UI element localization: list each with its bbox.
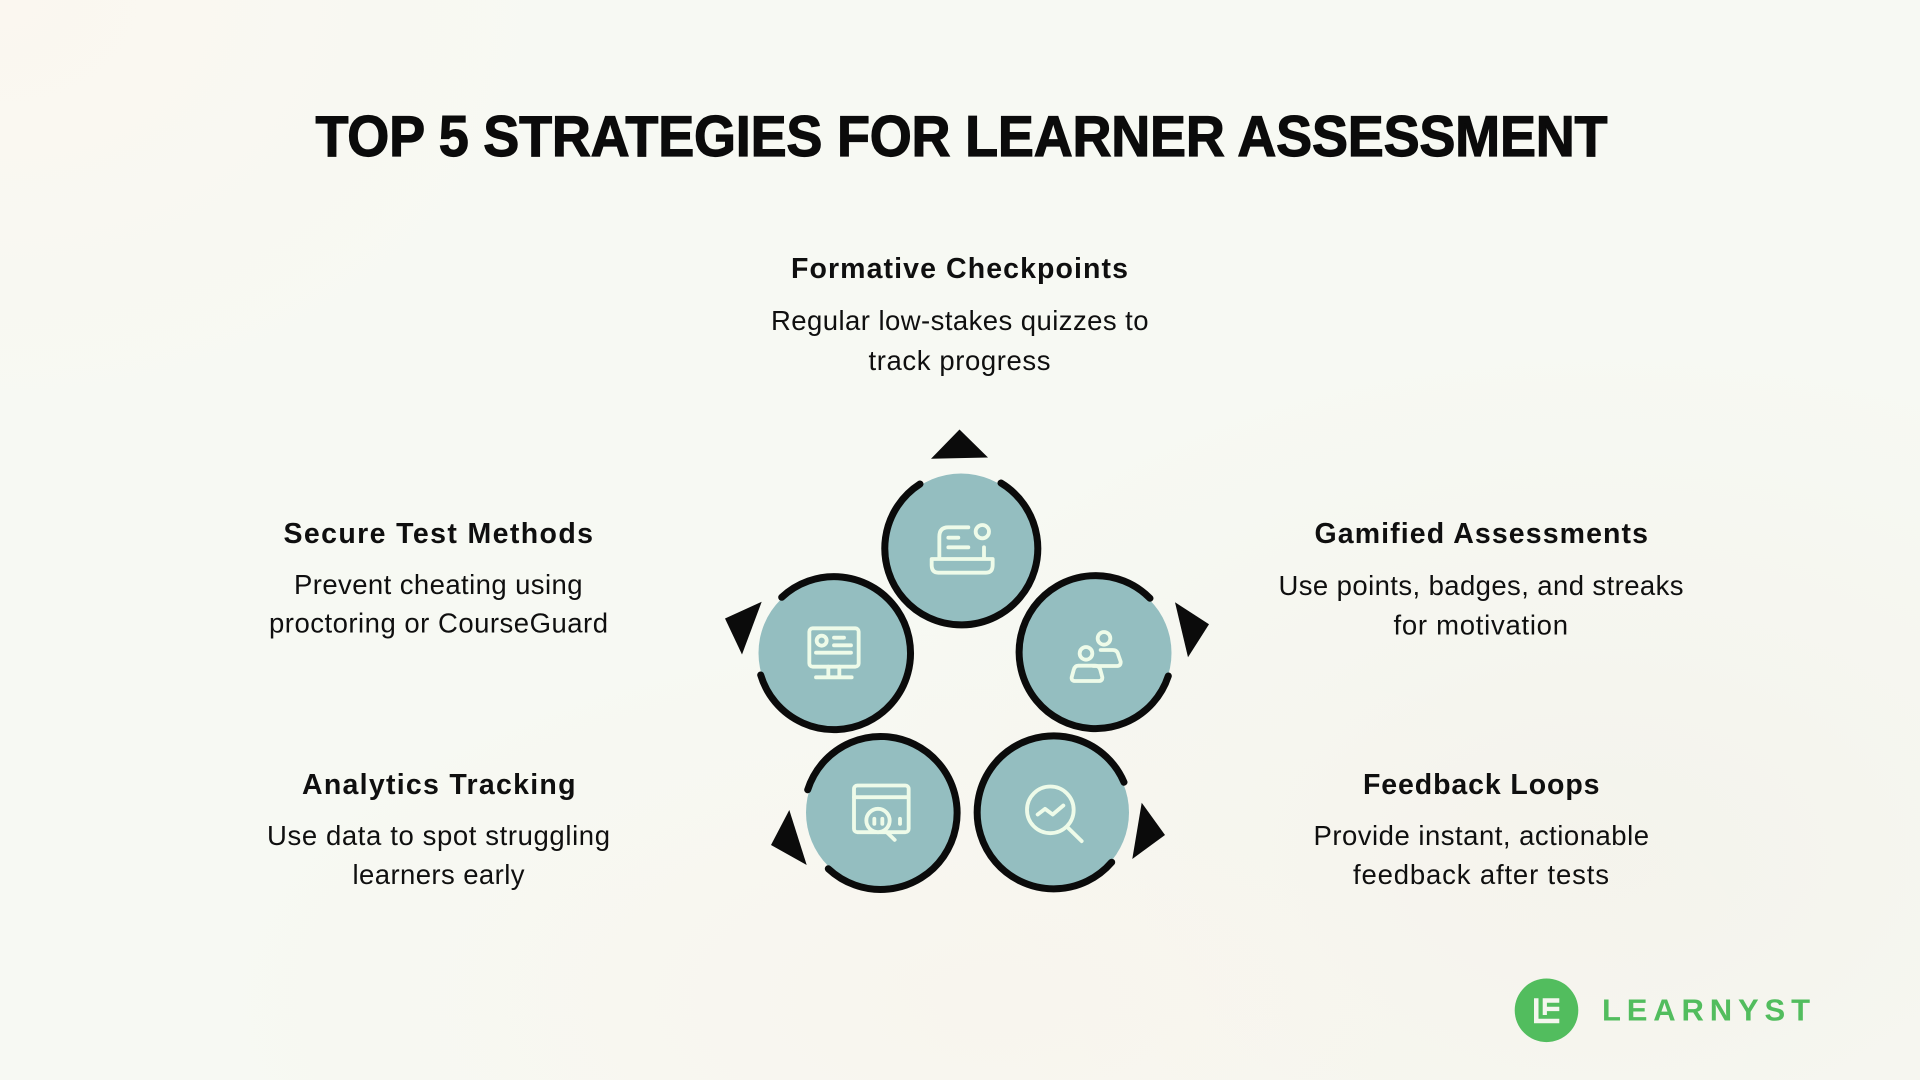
- node: left circle: [758, 577, 911, 730]
- node: top circle: [885, 474, 1038, 625]
- description: Gamified Assessments: Use points, badges, and streaks: [1278, 570, 1684, 601]
- description: Secure Test Methods: [269, 569, 608, 638]
- panel: Gamified Assessments: [1278, 518, 1684, 640]
- description: Analytics Tracking: [267, 820, 610, 890]
- description: Feedback Loops: feedback after tests: [1353, 859, 1609, 890]
- panel: Feedback Loops: [1314, 769, 1649, 890]
- description: Formative Checkpoints: Regular low-stakes quizzes to: [771, 305, 1148, 336]
- icon: browser window with magnifier: [854, 785, 909, 840]
- icon: logo mark: [1515, 978, 1578, 1042]
- description: Secure Test Methods: Prevent cheating using: [294, 569, 582, 600]
- description: Formative Checkpoints: track progress: [868, 345, 1050, 376]
- node: right circle: [1019, 576, 1172, 729]
- icon: monitor with profile card: [809, 628, 859, 677]
- heading: Analytics Tracking: Analytics Tracking: [302, 769, 576, 801]
- diagram: five-part circular cycle: [725, 430, 1209, 889]
- arrow: lower right: [1132, 803, 1165, 859]
- description: Feedback Loops: [1314, 820, 1649, 890]
- description: Secure Test Methods: proctoring or CourseGuard: [269, 608, 608, 638]
- arrow: upper right: [1175, 602, 1209, 657]
- icon: magnifier with trend line: [1027, 786, 1082, 841]
- heading: Feedback Loops: Feedback Loops: [1363, 769, 1600, 801]
- logo: Learnyst: [1515, 978, 1810, 1042]
- panel: Secure Test Methods: [269, 518, 608, 638]
- arrow: lower left: [771, 810, 807, 865]
- node: lower right circle: [977, 736, 1129, 889]
- heading: Formative Checkpoints: Formative Checkpoints: [791, 253, 1128, 285]
- description: Gamified Assessments: for motivation: [1394, 610, 1568, 640]
- description: Analytics Tracking: learners early: [352, 859, 525, 890]
- description: Gamified Assessments: [1278, 570, 1684, 640]
- icon: two people: [1072, 632, 1121, 681]
- description: Feedback Loops: Provide instant, actionable: [1314, 820, 1649, 851]
- title: TOP 5 STRATEGIES FOR LEARNER ASSESSMENT: [316, 103, 1608, 168]
- heading: Secure Test Methods: Secure Test Methods: [284, 518, 593, 550]
- panel: Analytics Tracking: [267, 769, 610, 890]
- wordmark: LEARNYST: [1602, 993, 1810, 1028]
- heading: Gamified Assessments: Gamified Assessments: [1314, 518, 1648, 550]
- description: Analytics Tracking: Use data to spot struggling: [267, 820, 610, 851]
- arrow: upper left: [725, 602, 762, 654]
- icon: laptop with profile: [932, 525, 993, 573]
- description: Formative Checkpoints: [771, 305, 1148, 376]
- panel: Formative Checkpoints: [771, 253, 1148, 376]
- node: lower left circle: [806, 736, 957, 889]
- arrow: top: [931, 430, 988, 459]
